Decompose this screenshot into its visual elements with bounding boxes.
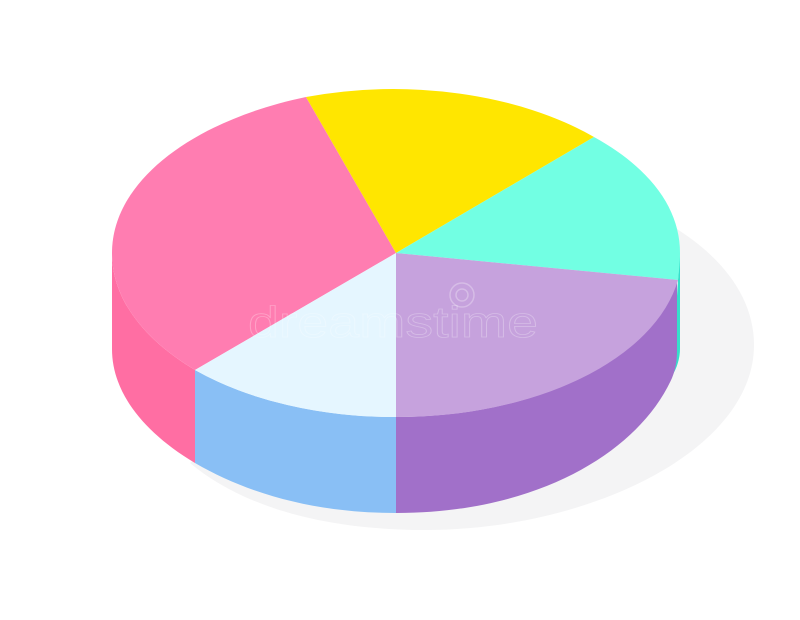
top slice: pale blue xyxy=(195,253,396,417)
side wall: blue slice xyxy=(195,370,396,513)
watermark text: dreamstime xyxy=(248,298,538,347)
drop shadow xyxy=(190,226,754,530)
top slice: pink xyxy=(112,97,396,370)
pie chart xyxy=(112,89,680,513)
side wall: pink slice xyxy=(112,253,195,463)
top slice: yellow xyxy=(306,89,594,253)
side wall: purple slice xyxy=(396,280,677,513)
top slice: lilac xyxy=(396,253,678,417)
watermark xyxy=(248,283,538,347)
watermark logo xyxy=(450,283,474,307)
side wall: teal slice xyxy=(672,253,680,376)
top slice: mint xyxy=(396,137,680,280)
